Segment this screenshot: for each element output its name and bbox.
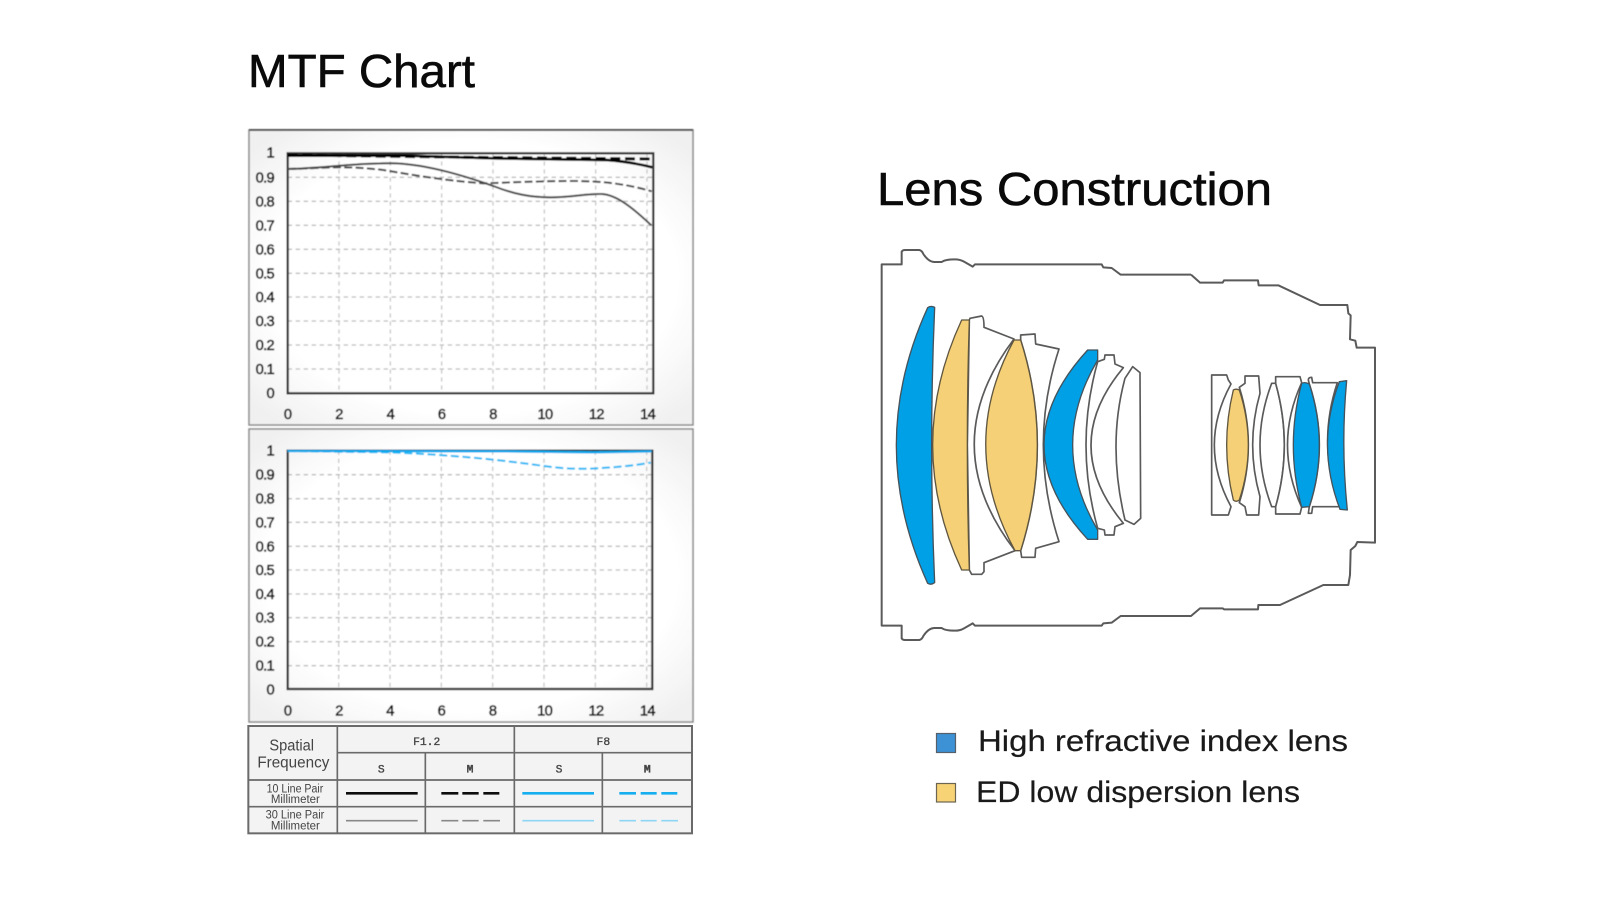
panel: upper MTF chart (F1.2) [249, 130, 693, 425]
curve: 30 lp/mm M dashed grey [288, 167, 652, 191]
y axis labels: 0.7 [256, 218, 275, 234]
header: Spatial Frequency: Frequency [257, 755, 330, 772]
curve: 10 lp/mm M dashed black [288, 155, 652, 159]
header: apertures and sagittal/meridional: F8 [597, 737, 610, 749]
label: High refractive index lens: High refractive index lens [978, 725, 1348, 758]
swatch: yellow [936, 784, 956, 802]
y axis labels: 0.6 [256, 242, 275, 258]
front group: white lens behind ED lens [1021, 334, 1059, 557]
header: apertures and sagittal/meridional: M [467, 765, 474, 777]
curve: black reference lines [507, 448, 652, 454]
x axis labels: 4 [386, 704, 394, 720]
title: MTF Chart: MTF Chart [248, 45, 475, 97]
front group: yellow ED biconvex lens [986, 340, 1037, 551]
legend: lens types [936, 725, 1348, 809]
x axis labels: 8 [489, 407, 497, 423]
y axis labels: 0.4 [256, 290, 275, 306]
x axis labels: 0 [284, 704, 292, 720]
rear white element 4 [1276, 377, 1302, 514]
y axis labels: 0.5 [256, 266, 275, 282]
rear white element 3 [1260, 383, 1284, 507]
y axis labels: 0.9 [256, 468, 275, 484]
curve: 30 lp/mm S solid grey [288, 163, 651, 225]
header: apertures and sagittal/meridional: S [556, 765, 563, 777]
y axis labels: 0.4 [256, 587, 275, 603]
header: apertures and sagittal/meridional: F1.2 [413, 737, 440, 749]
x axis labels: 14 [640, 407, 656, 423]
y axis labels: 0.9 [256, 170, 275, 186]
diagram: lens construction cross-section [882, 250, 1375, 640]
y axis labels: 1 [266, 443, 274, 459]
rear group [1212, 375, 1347, 515]
y axis labels [256, 443, 275, 698]
rear white element 5 [1308, 377, 1340, 513]
y axis labels: 0.3 [256, 314, 275, 330]
row labels: 10 Line Pair [267, 782, 323, 796]
label: ED low dispersion lens: ED low dispersion lens [976, 776, 1300, 809]
x axis labels: 6 [438, 704, 446, 720]
x axis labels: 0 [284, 407, 292, 423]
y axis labels: 0.7 [256, 515, 275, 531]
row labels [266, 782, 324, 833]
x axis labels: 10 [538, 407, 553, 423]
table: spatial frequency legend [248, 726, 692, 833]
lens barrel outline [882, 250, 1375, 640]
x axis labels: 12 [589, 704, 604, 720]
row labels: Millimeter [271, 792, 320, 806]
y axis labels: 0.2 [256, 635, 275, 651]
curve: 30 lp/mm M dashed light blue [288, 451, 651, 469]
rear blue lens 2 [1327, 381, 1347, 510]
rear yellow ED lens [1227, 389, 1248, 501]
x axis labels: 2 [335, 407, 343, 423]
header: apertures and sagittal/meridional [378, 737, 651, 777]
y axis labels: 0 [266, 386, 274, 402]
title: Lens Construction: Lens Construction [877, 163, 1272, 215]
front group: yellow ED lens [933, 320, 969, 570]
front group: last white lens [1116, 367, 1141, 524]
x axis labels: 4 [387, 407, 395, 423]
x axis labels: 6 [438, 407, 446, 423]
y axis labels: 0.3 [256, 611, 275, 627]
y axis labels: 0.6 [256, 539, 275, 555]
x axis labels: 10 [537, 704, 553, 720]
y axis labels: 0.5 [256, 563, 275, 579]
header: Spatial Frequency [257, 738, 330, 772]
x axis labels: 12 [589, 407, 604, 423]
y axis labels: 0.1 [256, 362, 275, 378]
plot frame [288, 451, 652, 689]
y axis labels: 0 [266, 682, 274, 698]
x axis labels: 8 [489, 704, 497, 720]
y axis labels: 0.1 [256, 659, 275, 675]
swatch: blue [936, 734, 956, 752]
x axis labels [284, 704, 655, 720]
row labels: 30 Line Pair [266, 807, 324, 821]
row labels: Millimeter [271, 819, 320, 833]
x axis labels: 14 [640, 704, 655, 720]
curve: 10 lp/mm S solid black [288, 156, 652, 167]
y axis labels: 0.8 [256, 491, 275, 507]
legend line samples [346, 793, 678, 821]
rear white element 2 [1239, 376, 1260, 515]
header: apertures and sagittal/meridional: S [378, 765, 385, 777]
front group: white meniscus lens [1086, 355, 1123, 535]
y axis labels: 1 [266, 146, 274, 162]
y axis labels: 0.8 [256, 194, 275, 210]
rear white element 1 [1212, 375, 1231, 515]
y axis labels: 0.2 [256, 338, 275, 354]
x axis labels: 2 [335, 704, 343, 720]
rear blue lens 1 [1293, 383, 1319, 507]
header: Spatial Frequency: Spatial [269, 738, 314, 755]
front group: white lens element [967, 316, 1015, 574]
front group: blue high refractive lens [896, 306, 935, 584]
header: apertures and sagittal/meridional: M [644, 765, 651, 777]
panel: lower MTF chart (F8) [249, 429, 693, 722]
y axis labels [256, 146, 275, 402]
curve: 10 lp/mm S solid blue [288, 451, 652, 452]
x axis labels [284, 407, 656, 423]
front group: blue meniscus lens [1044, 350, 1098, 539]
plot frame [288, 153, 653, 393]
